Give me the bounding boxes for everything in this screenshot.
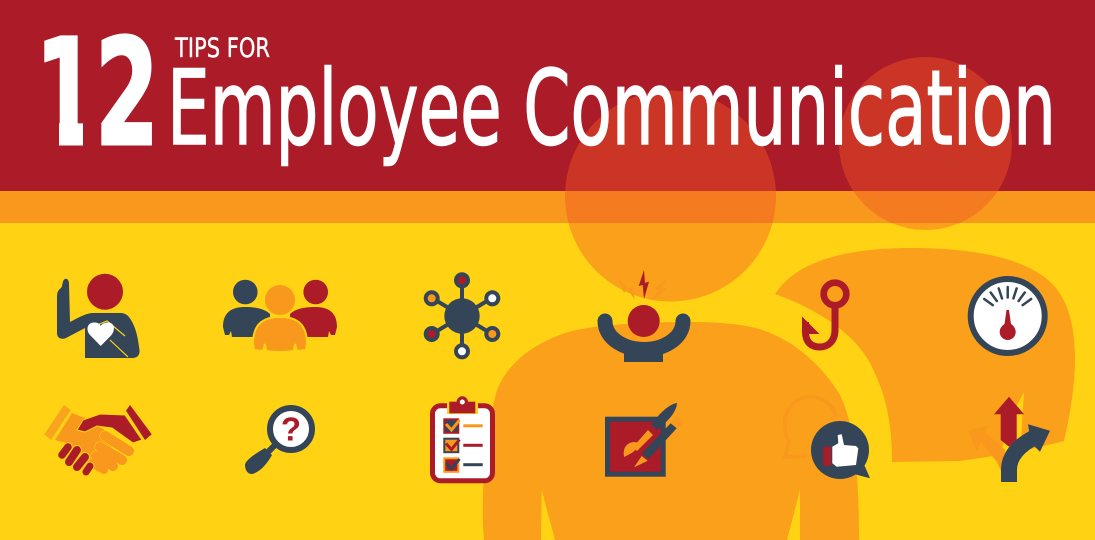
- front figure silhouette: [483, 90, 859, 540]
- icon: stressed person with lightning: [605, 270, 683, 362]
- icon: fish hook: [802, 283, 846, 347]
- icon: handshake: [44, 405, 152, 472]
- icon: magnifier with question mark: [245, 408, 312, 474]
- number 12: 2: [95, 8, 159, 179]
- icon: clipboard checklist: [432, 396, 492, 481]
- tips for: TIPS FOR: [174, 33, 270, 64]
- number 12: [44, 33, 152, 146]
- icon: speech bubble with thumbs up: [785, 397, 870, 479]
- back figure silhouette: [775, 57, 1075, 462]
- icon: gauge: [971, 279, 1045, 353]
- icon: paintbrush and pencil on canvas: [608, 403, 684, 474]
- icon: team of three people: [223, 280, 337, 352]
- title: [44, 33, 1051, 166]
- icon: network hub: [424, 272, 500, 359]
- number 12: 1: [35, 8, 98, 179]
- icon: magnifier with question mark: ?: [281, 410, 301, 448]
- icon: person pledging with heart: [57, 274, 140, 358]
- icon: diverging arrows: [968, 397, 1050, 482]
